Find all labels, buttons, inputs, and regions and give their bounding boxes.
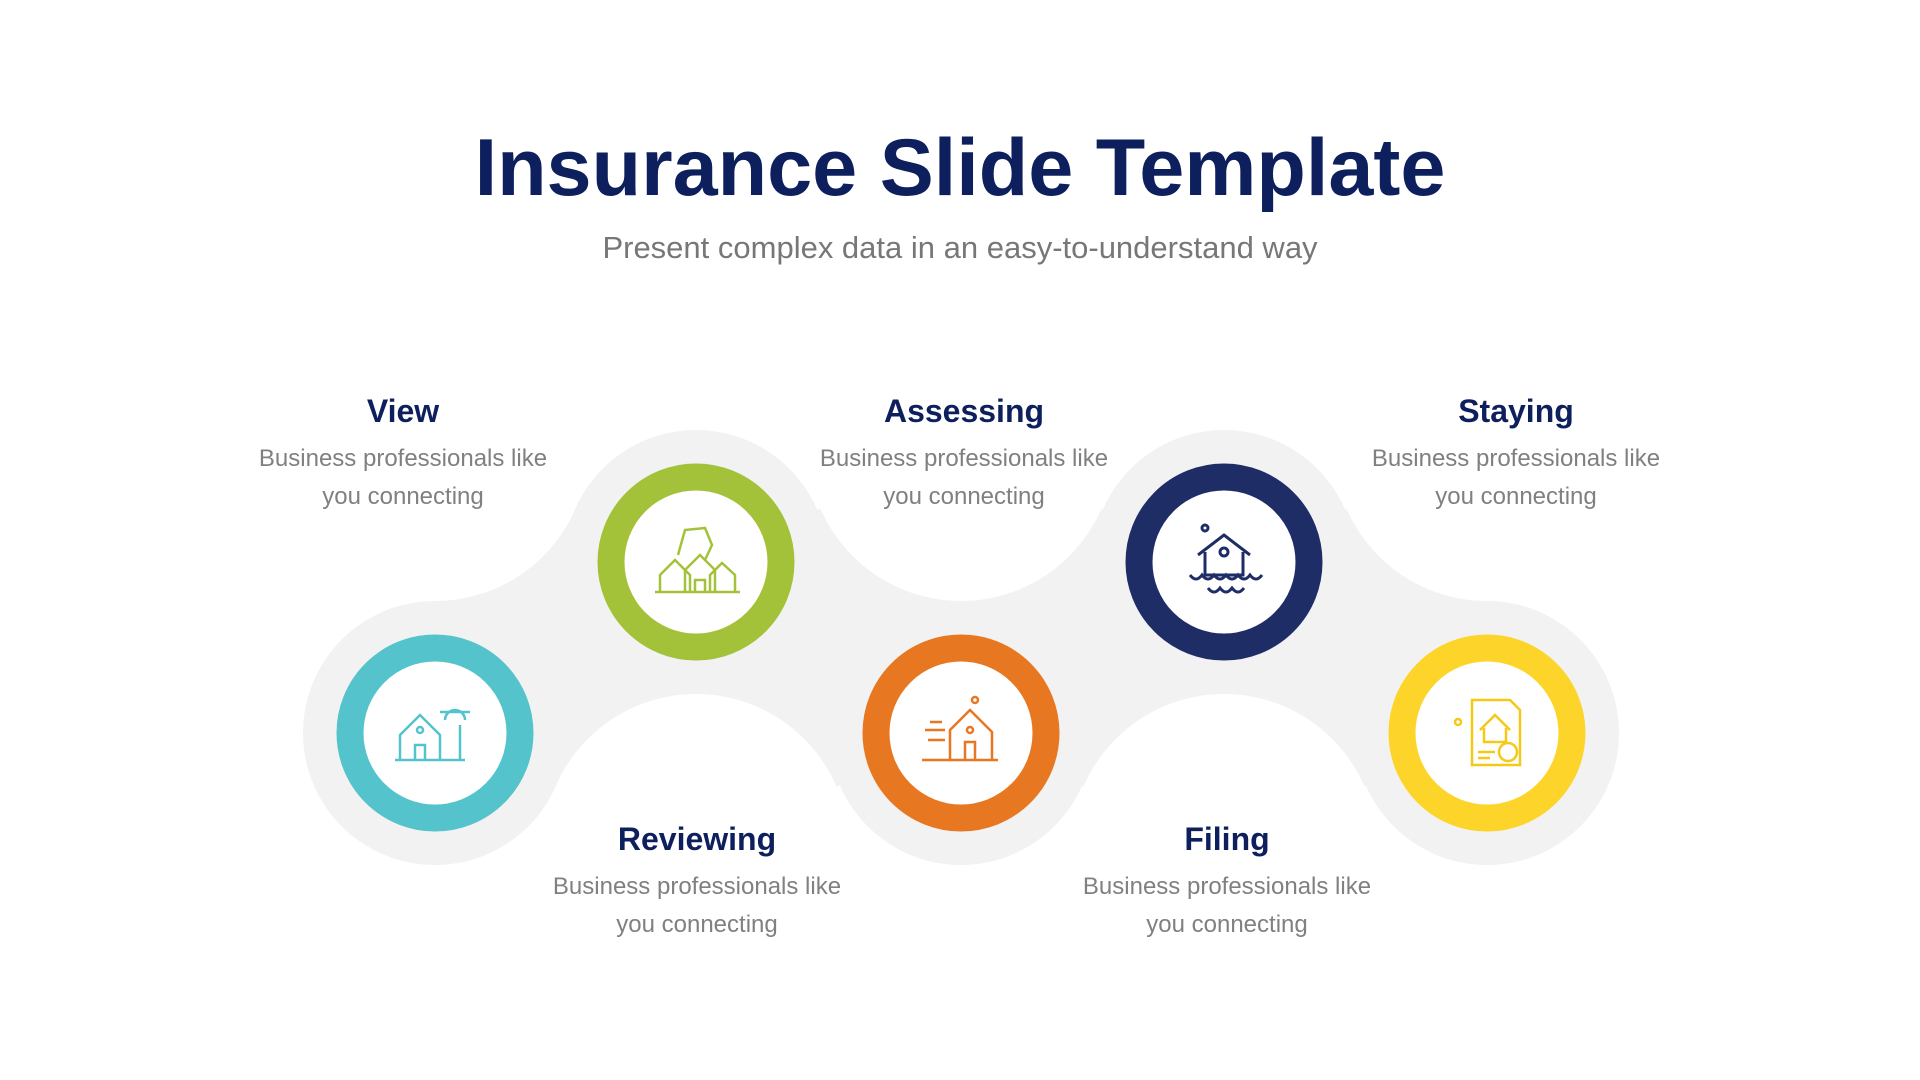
step: Assessing: Assessing bbox=[884, 393, 1044, 429]
circle: green bbox=[611, 477, 781, 647]
step: Staying: you connecting bbox=[1435, 483, 1597, 510]
step: Filing: Business professionals like bbox=[1083, 873, 1371, 900]
step: View: you connecting bbox=[322, 483, 484, 510]
step: Assessing: Business professionals like bbox=[820, 445, 1108, 472]
step: Reviewing: Reviewing bbox=[618, 821, 776, 857]
circle: yellow bbox=[1402, 648, 1572, 818]
circle: teal bbox=[350, 648, 520, 818]
step: Reviewing: you connecting bbox=[616, 911, 778, 938]
subtitle: Present complex data in an easy-to-understand way bbox=[602, 230, 1318, 265]
step: Staying bbox=[1372, 393, 1660, 510]
step: Assessing: you connecting bbox=[883, 483, 1045, 510]
step: Staying: Staying bbox=[1458, 393, 1574, 429]
step: Filing: Filing bbox=[1184, 821, 1270, 857]
step: Reviewing bbox=[553, 821, 841, 938]
step: Assessing bbox=[820, 393, 1108, 510]
circle: orange bbox=[876, 648, 1046, 818]
step: Staying: Business professionals like bbox=[1372, 445, 1660, 472]
circle: navy bbox=[1139, 477, 1309, 647]
step: View: View bbox=[367, 393, 439, 429]
step: Reviewing: Business professionals like bbox=[553, 873, 841, 900]
title: Insurance Slide Template bbox=[475, 123, 1445, 213]
step: Filing bbox=[1083, 821, 1371, 938]
step: View bbox=[259, 393, 547, 510]
step: Filing: you connecting bbox=[1146, 911, 1308, 938]
step: View: Business professionals like bbox=[259, 445, 547, 472]
